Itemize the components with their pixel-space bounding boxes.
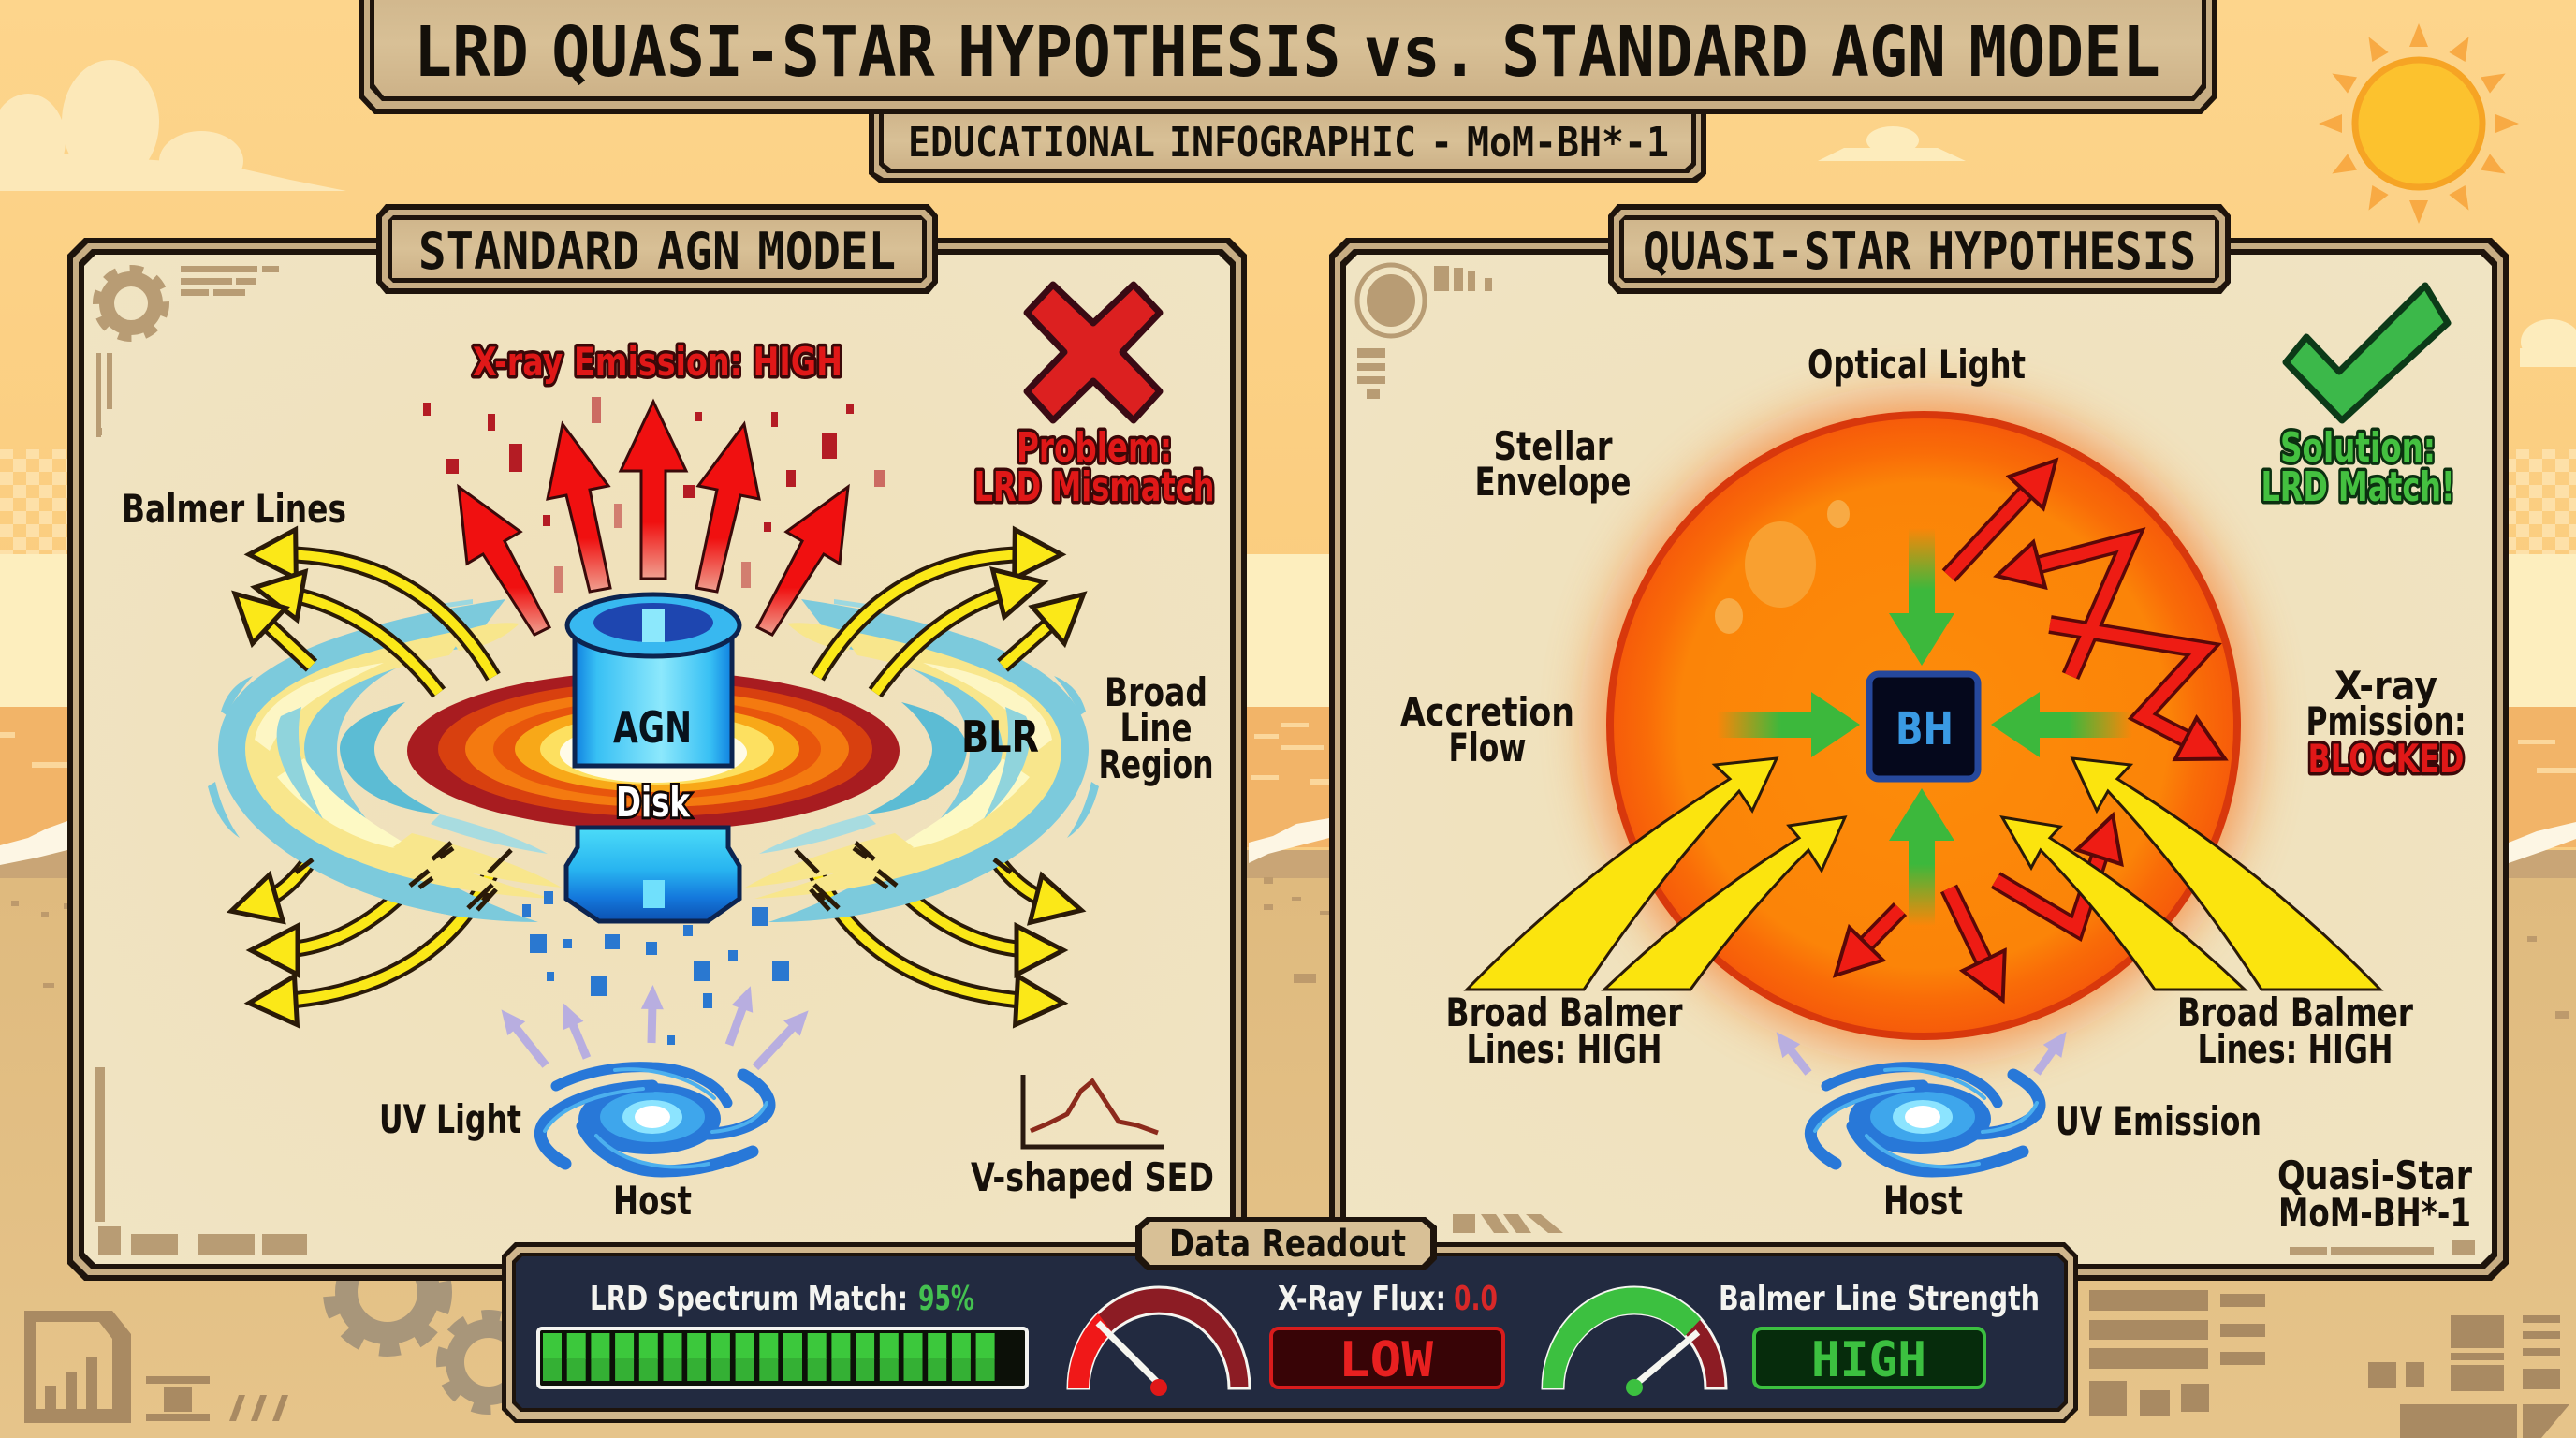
problem label: Problem: [1017,424,1172,472]
LRD spectrum progress bar [538,1328,1027,1387]
tab: standard AGN model [376,204,938,294]
UV emission arrows [1788,1047,2056,1073]
background: sand [0,878,2576,1438]
yellow Balmer wedges [1467,758,2380,990]
background: surf right [2509,822,2576,863]
label: Stellar Envelope [1475,423,1631,505]
label: Broad Balmer right [2177,990,2413,1072]
LRD spectrum label: 95% [918,1280,974,1318]
solution label: Solution: [2280,424,2436,472]
blue particles [522,891,789,1045]
label: Host right: Host [1883,1178,1963,1224]
panel: standard AGN model [67,238,1247,1281]
background: pale horizon clouds [0,554,2576,708]
background: desert sky [0,0,2576,712]
tab: quasi-star hypothesis [1608,204,2231,294]
background: halftone haze left [0,449,67,566]
accretion disk [407,671,900,830]
label: Accretion Flow: Accretion [1400,689,1574,735]
label: BH: BH [1895,703,1954,756]
icon: red X [1027,285,1160,420]
decoration: bottom-right data bars [2089,1290,2569,1438]
title banner [359,0,2217,114]
label: Quasi-Star MoM-BH*-1: Quasi-Star [2277,1152,2472,1198]
label: UV Emission: UV Emission [2056,1098,2261,1144]
tab text: QUASI-STAR HYPOTHESIS [1643,222,2196,281]
X-ray flux label: 0.0 [1454,1280,1498,1318]
background: sea band [0,707,2576,847]
label: X-ray Emission HIGH: X-ray Emission: HIGH [473,339,842,385]
decoration: corner gear [96,266,279,437]
label: V-shaped SED: V-shaped SED [971,1154,1214,1200]
chart: V-shaped SED [1023,1075,1164,1147]
panel: quasi-star hypothesis [1329,238,2509,1281]
Balmer strength label: Balmer Line Strength [1719,1280,2040,1318]
label: Broad Balmer left [1445,990,1683,1072]
quasi-star sphere glow [1596,400,2251,1051]
label: Accretion Flow: Flow [1449,725,1526,770]
BLR swirl: left lobe [208,599,562,922]
green accretion arrows [1717,528,2132,926]
background: halftone haze right [2509,449,2576,566]
label: Broad Balmer right: Broad Balmer [2177,990,2413,1035]
solution label: LRD Match! [2261,463,2454,511]
decoration: bottom-left bars [95,1067,307,1255]
decoration: bottom stripes [1453,1214,2475,1255]
label: Quasi-Star MoM-BH*-1: MoM-BH*-1 [2278,1190,2471,1236]
label: Optical Light: Optical Light [1808,342,2026,388]
title text: LRD QUASI-STAR HYPOTHESIS vs. STANDARD AGN MODEL [414,12,2160,93]
problem label [973,424,1215,511]
black hole box [1869,674,1978,779]
label: Quasi-Star MoM-BH*-1 [2277,1152,2472,1236]
status box: HIGH [1754,1328,1984,1388]
tab text: Data Readout [1169,1223,1406,1266]
problem label: LRD Mismatch [973,463,1215,511]
cloud: large left [0,60,346,191]
label: Broad Balmer left: Broad Balmer [1445,990,1683,1035]
subtitle banner [869,114,1706,183]
decoration: bottom gears [329,1234,535,1409]
status box: HIGH: HIGH [1811,1332,1926,1388]
background: surf centre [1249,818,1329,863]
label: Broad Balmer left: Lines: HIGH [1466,1026,1662,1072]
gauge: X-ray flux [1068,1287,1250,1396]
icon: host galaxy right [1810,1067,2040,1171]
decoration: corner dial [1357,265,1492,399]
label: Broad Line Region [1099,669,1213,787]
gauge: Balmer line strength [1543,1287,1726,1396]
BLR swirl: right lobe [745,599,1099,922]
icon: host galaxy [540,1067,769,1171]
background: sand specks [11,877,2569,1019]
label: Disk: Disk [616,779,691,827]
quasi-star sphere [1610,415,2237,1036]
background: surf left [0,821,67,865]
label: X-ray emission blocked: Pmission: [2306,698,2466,744]
icon: sun [2319,23,2519,224]
label: Host: Host [613,1178,692,1224]
label: Broad Balmer right: Lines: HIGH [2198,1026,2393,1072]
subtitle text: EDUCATIONAL INFOGRAPHIC - MoM-BH*-1 [908,119,1669,167]
label: UV Light: UV Light [379,1096,521,1142]
tab text: STANDARD AGN MODEL [418,222,896,281]
label: X-ray emission blocked: X-ray [2334,663,2437,709]
UV light arrows [513,1004,796,1067]
label: X-ray emission blocked [2306,663,2466,782]
red debris particles [423,397,886,593]
label: Accretion Flow [1400,689,1574,770]
tab: data readout [1135,1217,1437,1270]
yellow Balmer arrows: lower [255,847,1058,1002]
red blocked X-ray arrows [1859,485,2203,970]
cloud: right edge [2520,319,2576,367]
label: Stellar Envelope: Envelope [1475,459,1631,505]
label: Stellar Envelope: Stellar [1494,423,1613,469]
label: X-ray emission blocked: BLOCKED [2308,736,2464,782]
red X-ray arrows [459,402,848,635]
label: Balmer Lines: Balmer Lines [122,486,346,532]
status box: LOW: LOW [1339,1332,1434,1388]
label: Broad Line Region: Line [1120,705,1193,751]
label: Broad Line Region: Region [1099,741,1213,787]
AGN cylinder: lower section [566,828,739,921]
icon: green check [2286,286,2448,420]
X-ray flux label: X-Ray Flux: [1278,1280,1446,1318]
cloud: small centre [1818,126,1966,161]
yellow Balmer arrows: upper [253,554,1065,693]
label: BLR: BLR [961,712,1039,762]
status box: LOW [1271,1328,1503,1388]
LRD spectrum label: LRD Spectrum Match: [590,1280,908,1318]
arrow fragments over swirl [296,843,1011,910]
panel: data readout [502,1242,2078,1423]
AGN cylinder: upper section [567,594,739,766]
decoration: bottom-left data card [24,1311,288,1423]
background: wet sand [0,850,2576,880]
background: sea glints [0,723,2576,785]
solution label [2261,424,2454,511]
label: AGN: AGN [613,702,692,753]
label: Broad Line Region: Broad [1105,669,1208,715]
